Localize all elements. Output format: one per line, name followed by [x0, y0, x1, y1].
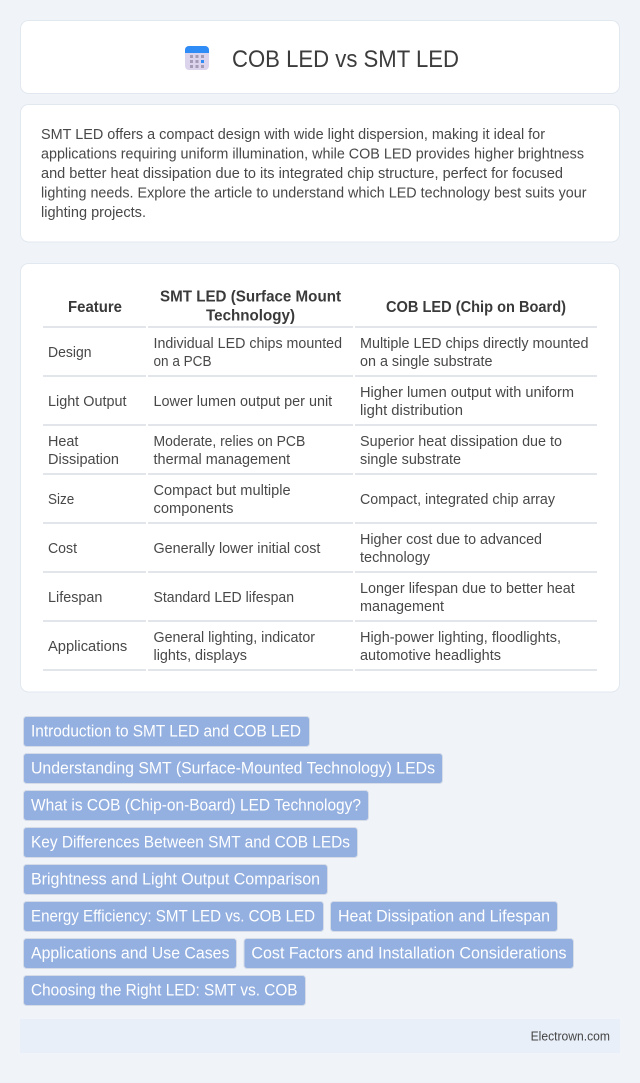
tag: key differences: Key Differences Between SMT and COB LEDs: [31, 834, 350, 852]
tag: brightness: Brightness and Light Output Comparison: [31, 870, 320, 888]
table row: applications: Applications: [48, 639, 127, 655]
table row: heat dissipation: Superior heat dissipation due to: [360, 434, 562, 450]
table row: design: [48, 336, 588, 370]
text block: summary: lighting needs. Explore the article to understand which LED technology best suits your: [41, 186, 587, 202]
tag: cost factors: Cost Factors and Installation Considerations: [251, 944, 566, 962]
table row: light output: light distribution: [360, 403, 463, 419]
tag: heat dissipation: Heat Dissipation and Lifespan: [338, 908, 550, 926]
tag: energy efficiency: Energy Efficiency: SMT LED vs. COB LED: [31, 908, 315, 926]
table row: cost: [48, 532, 542, 566]
tag: applications: Applications and Use Cases: [31, 944, 229, 962]
table row: heat dissipation: single substrate: [360, 452, 461, 468]
table row: light output: Higher lumen output with uniform: [360, 385, 574, 401]
tag: understanding SMT: [24, 754, 442, 784]
table row: size: Compact, integrated chip array: [360, 492, 556, 508]
section tags: [24, 716, 574, 1006]
table row: lifespan: Longer lifespan due to better heat: [360, 581, 575, 597]
tag: key differences: [24, 828, 358, 858]
table row: light output: [48, 385, 574, 419]
tag: choosing: [24, 976, 306, 1006]
tag: applications: [24, 938, 236, 968]
tag: brightness: [24, 864, 328, 894]
table row: heat dissipation: Heat: [48, 434, 78, 450]
text block: summary: applications requiring uniform illumination, while COB LED provides higher brightness: [41, 146, 584, 162]
text block: summary: and better heat dissipation due to its integrated chip structure, perfect for focused: [41, 166, 563, 182]
table row: cost: Cost: [48, 541, 77, 557]
tag: heat dissipation: [330, 902, 558, 932]
table row: design: Individual LED chips mounted: [154, 336, 342, 352]
tag: understanding SMT: Understanding SMT (Surface-Mounted Technology) LEDs: [31, 760, 435, 778]
table row: applications: General lighting, indicator: [154, 630, 315, 646]
icon: calendar: [185, 46, 209, 70]
table row: cost: Generally lower initial cost: [154, 541, 320, 557]
table header row: SMT LED (Surface Mount: [160, 288, 342, 306]
table row: size: components: [154, 501, 234, 517]
table header row: Feature: [68, 299, 122, 316]
table row: applications: lights, displays: [154, 648, 247, 664]
table row: heat dissipation: Dissipation: [48, 452, 119, 468]
table row: applications: [48, 630, 561, 664]
footer credit: Electrown.com: [531, 1028, 610, 1044]
text block: summary: lighting projects.: [41, 205, 146, 221]
title: COB LED vs SMT LED: [232, 46, 459, 73]
table row: size: [48, 483, 556, 517]
table row: design: Multiple LED chips directly mounted: [360, 336, 588, 352]
text block: summary: [41, 127, 587, 221]
tag: cost factors: [244, 938, 574, 968]
panel: introduction paragraph: [20, 104, 620, 242]
footer: [20, 1019, 620, 1053]
table row: design: Design: [48, 345, 92, 361]
table row: heat dissipation: Moderate, relies on PCB: [154, 434, 305, 450]
table header row: [68, 288, 566, 324]
tag: introduction: [24, 716, 310, 746]
tag: what is COB: [24, 790, 368, 820]
table row: size: Size: [48, 492, 74, 508]
panel: comparison table: [20, 264, 620, 692]
table row: size: Compact but multiple: [154, 483, 291, 499]
panel: title header: [20, 20, 620, 94]
table row: heat dissipation: [48, 434, 562, 468]
table header row: Technology): [206, 308, 295, 324]
tag: choosing: Choosing the Right LED: SMT vs. COB: [31, 982, 298, 1000]
table row: lifespan: management: [360, 599, 444, 615]
table row: cost: Higher cost due to advanced: [360, 532, 542, 548]
table row: lifespan: Standard LED lifespan: [154, 590, 294, 606]
table row: applications: High-power lighting, floodlights,: [360, 630, 561, 646]
tag: introduction: Introduction to SMT LED and COB LED: [31, 722, 301, 740]
table row: design: on a PCB: [154, 354, 212, 370]
table row: heat dissipation: thermal management: [154, 452, 290, 468]
tag: energy efficiency: [24, 902, 324, 932]
table row: applications: automotive headlights: [360, 648, 501, 664]
table row: design: on a single substrate: [360, 354, 492, 370]
table header row: COB LED (Chip on Board): [386, 299, 566, 316]
table row: light output: Lower lumen output per unit: [154, 394, 332, 410]
table row: cost: technology: [360, 550, 431, 566]
table row: lifespan: [48, 581, 575, 615]
text block: summary: SMT LED offers a compact design with wide light dispersion, making it ideal for: [41, 127, 545, 143]
table row: lifespan: Lifespan: [48, 590, 102, 606]
tag: what is COB: What is COB (Chip-on-Board) LED Technology?: [31, 796, 361, 814]
table row: light output: Light Output: [48, 394, 126, 410]
